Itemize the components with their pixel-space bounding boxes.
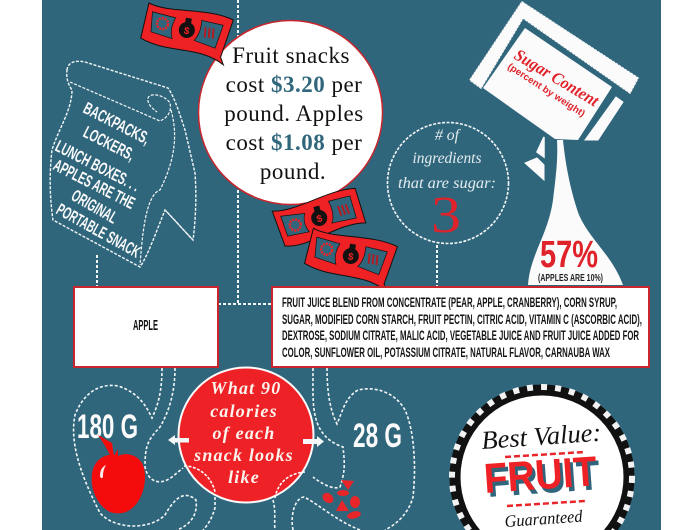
red calories circle: What 90 <box>211 378 281 398</box>
red calories circle: like <box>228 467 260 487</box>
icon: money bill top <box>139 2 234 65</box>
sugar percentage: 57% <box>540 234 598 276</box>
apple weight label: 180 G <box>77 408 138 446</box>
best value badge: FRUIT <box>485 451 602 506</box>
ingredients circle: # of <box>435 127 461 144</box>
arrow right <box>303 436 324 447</box>
sugar packet with pouring stream <box>470 2 638 285</box>
icon: red apple <box>92 435 145 513</box>
fruit snack weight label: 28 G <box>353 417 402 455</box>
fruit snack ingredient box <box>272 287 649 367</box>
icon: money bill top: $ <box>183 26 191 37</box>
ingredients circle <box>388 122 508 244</box>
best value badge: Best Value: <box>480 418 602 455</box>
percent by weight label: (percent by weight) <box>505 61 587 120</box>
ingredients circle: that are sugar: <box>398 175 496 192</box>
paper bag illustration with slogan: BACKPACKS, <box>80 99 153 148</box>
paper bag illustration with slogan: APPLES ARE THE <box>50 156 138 213</box>
arrow left <box>168 435 189 445</box>
sugar content label: Sugar Content <box>511 45 603 111</box>
red calories circle: calories <box>210 401 278 421</box>
ingredients circle: ingredients <box>412 150 482 167</box>
apple ingredient box <box>74 287 218 367</box>
red calories circle: snack looks <box>193 445 294 465</box>
main price circle: pound. <box>260 159 326 184</box>
paper bag illustration with slogan: PORTABLE SNACK <box>53 200 144 262</box>
icon: money bill bottom: $ <box>347 252 355 263</box>
paper bag illustration with slogan <box>50 61 196 267</box>
main price circle: Fruit snacks <box>232 43 350 68</box>
red calories circle: of each <box>213 423 275 443</box>
icon: money bill bottom <box>302 227 398 292</box>
main price circle: cost $1.08 per <box>226 130 362 155</box>
red calories circle <box>178 368 314 502</box>
main price circle <box>198 20 382 204</box>
paper bag illustration with slogan: ORIGINAL <box>68 186 121 227</box>
paper bag illustration with slogan: LOCKERS, <box>80 123 138 165</box>
main price circle: cost $3.20 per <box>226 72 362 97</box>
best value badge <box>452 387 632 530</box>
paper bag illustration with slogan: LUNCH BOXES. . . <box>52 137 143 195</box>
apple comparison note: (APPLES ARE 10%) <box>538 272 603 284</box>
best value badge: FRUIT <box>482 447 599 502</box>
icon: fruit snack pieces <box>321 480 362 520</box>
icon: money bill middle: $ <box>316 213 324 225</box>
icon: money bill middle <box>271 187 367 249</box>
main price circle: pound. Apples <box>224 101 364 126</box>
apple ingredient box: APPLE <box>133 317 158 334</box>
ingredients circle: 3 <box>431 187 461 244</box>
